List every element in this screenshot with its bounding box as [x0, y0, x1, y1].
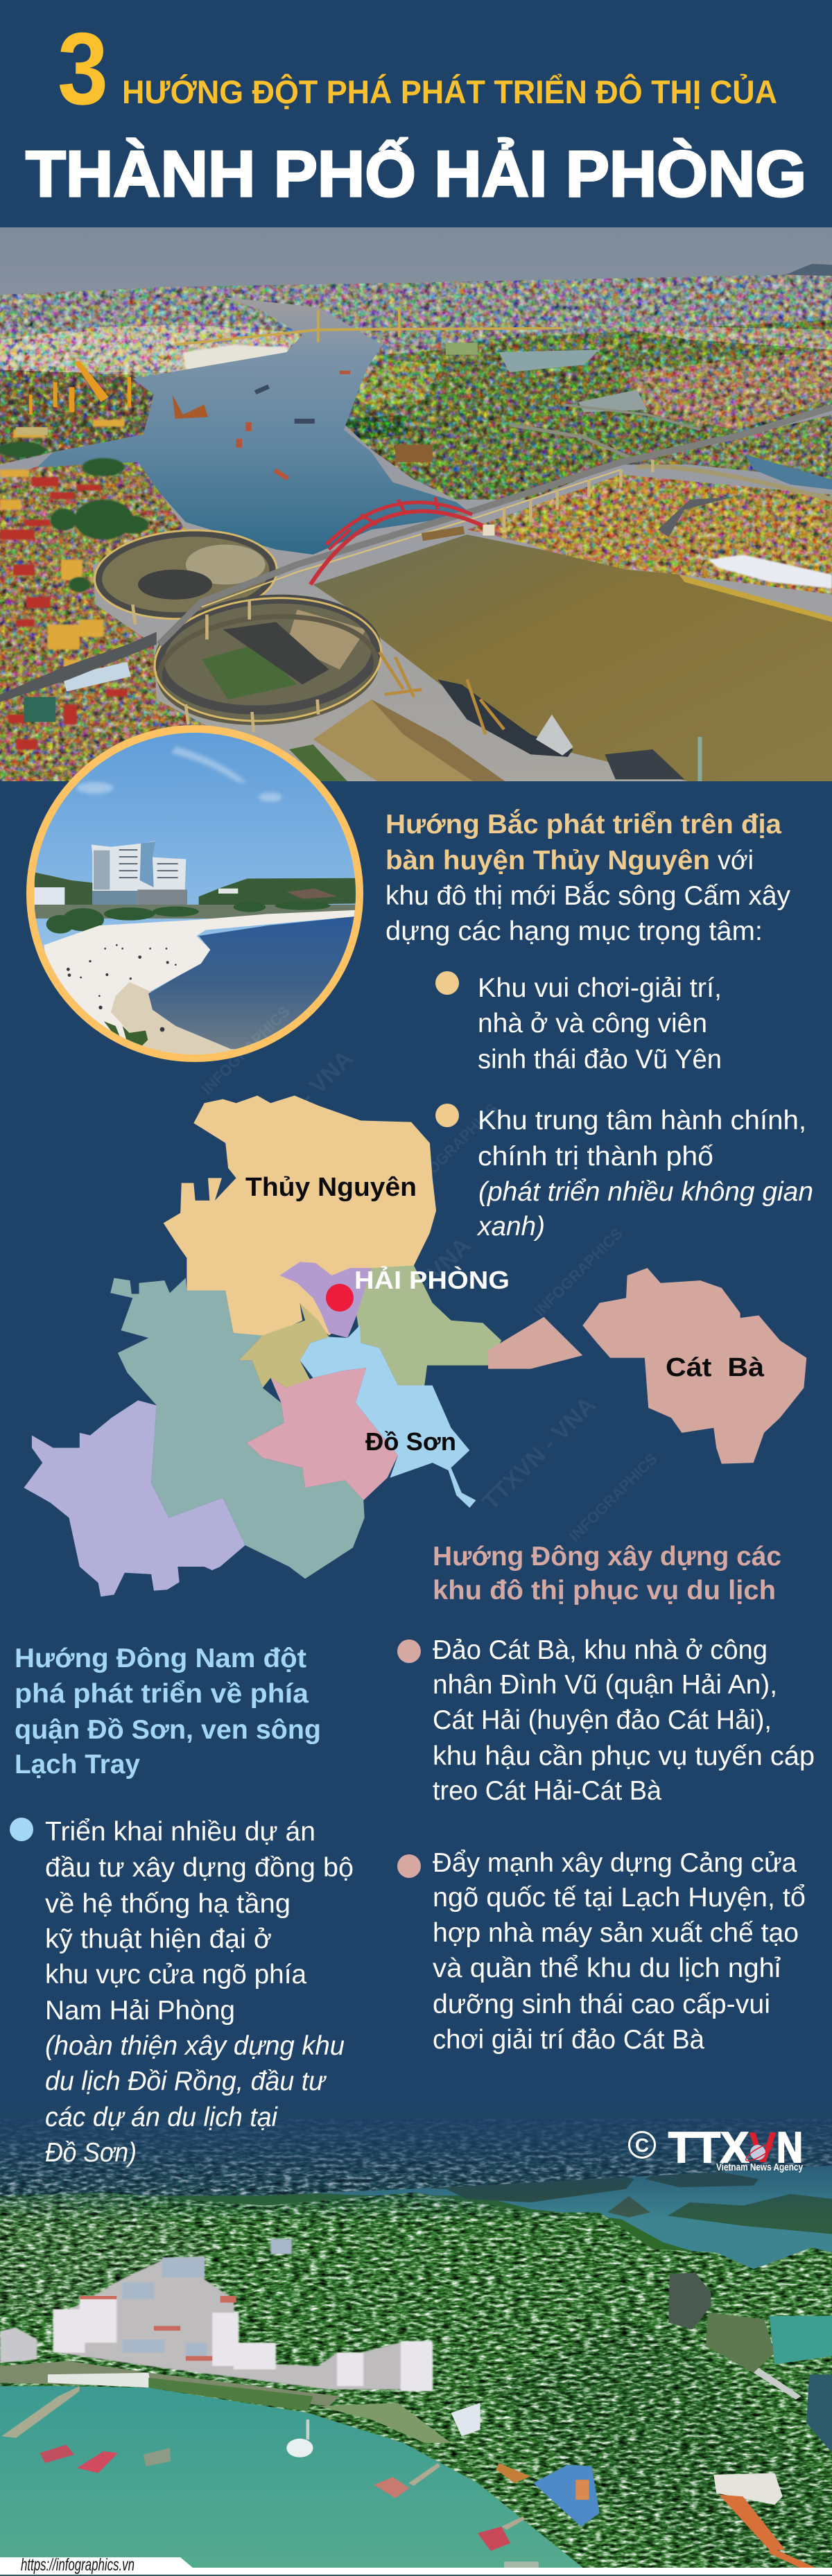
watermarks	[169, 1003, 661, 1545]
heading: east: khu đô thị phục vụ du lịch	[433, 1576, 776, 1605]
text: south-east	[45, 1817, 354, 2168]
text: south-east: các dự án du lịch tại	[45, 2103, 278, 2132]
text: east 1	[433, 1635, 815, 1806]
copyright mark	[630, 2132, 655, 2157]
map of Hai Phong	[24, 1095, 806, 1596]
watermarks: TTXVN - VNA	[169, 1416, 293, 1540]
text: east 2: và quần thể khu du lịch nghỉ	[433, 1953, 781, 1983]
map region: Do Son blue	[300, 1325, 476, 1508]
heading: north: Hướng Bắc phát triển trên địa	[385, 809, 781, 839]
wordmark: V	[749, 2124, 777, 2172]
label: Hai Phong: HẢI PHÒNG	[354, 1265, 510, 1294]
map region: green	[356, 1265, 501, 1385]
bullet: north 1	[435, 971, 459, 995]
text: north 1: nhà ở và công viên	[478, 1009, 707, 1038]
text: north 2: (phát triển nhiều không gian	[478, 1177, 813, 1207]
text: south-east: (hoàn thiện xây dựng khu	[45, 2031, 345, 2061]
text: south-east: về hệ thống hạ tầng	[45, 1889, 291, 1919]
heading: north: khu đô thị mới Bắc sông Cấm xây	[385, 881, 790, 911]
panel: east direction	[397, 1542, 815, 2055]
tagline: Vietnam News Agency	[716, 2161, 804, 2173]
map region: west purple	[24, 1400, 245, 1596]
text: north 2: chính trị thành phố	[478, 1142, 713, 1172]
heading: south-east: Lạch Tray	[15, 1750, 140, 1779]
map region: Cat Hai	[488, 1317, 582, 1369]
text: south-east: Nam Hải Phòng	[45, 1996, 235, 2026]
wordmark	[668, 2124, 803, 2172]
watermarks: INFOGRAPHICS	[531, 1225, 626, 1320]
url text: https://infographics.vn	[21, 2555, 135, 2575]
map region: pink	[247, 1368, 398, 1500]
marker: Hai Phong centre	[326, 1284, 354, 1312]
heading: east: Hướng Đông xây dựng các	[433, 1542, 781, 1572]
label: Cat Ba: Cát Bà	[666, 1353, 765, 1382]
text: east 1: khu hậu cần phục vụ tuyến cáp	[433, 1741, 815, 1771]
panel: south-east direction	[10, 1644, 354, 2168]
watermarks: TTXVN - VNA	[478, 1392, 601, 1515]
bullet: east 2	[397, 1854, 421, 1878]
text: east 2: hợp nhà máy sản xuất chế tạo	[433, 1918, 799, 1948]
text: south-east: Đồ Sơn)	[45, 2138, 137, 2168]
label: Do Son: Đồ Sơn	[365, 1427, 456, 1456]
map region: olive	[239, 1303, 329, 1388]
heading: south-east: phá phát triển về phía	[15, 1679, 309, 1709]
watermarks: INFOGRAPHICS	[198, 1003, 293, 1098]
text: north 1	[478, 973, 722, 1074]
title line one: HƯỚNG ĐỘT PHÁ PHÁT TRIỂN ĐÔ THỊ CỦA	[122, 73, 777, 110]
text: east 1: Cát Hải (huyện đảo Cát Hải),	[433, 1705, 772, 1735]
heading: east	[433, 1542, 781, 1605]
bullet: south-east	[10, 1818, 33, 1841]
heading: south-east: quận Đồ Sơn, ven sông	[15, 1715, 321, 1745]
map region: Thuy Nguyen	[164, 1095, 436, 1338]
text: east 2: Đẩy mạnh xây dựng Cảng cửa	[433, 1848, 797, 1878]
label: Thuy Nguyen: Thủy Nguyên	[245, 1173, 417, 1202]
title line two: THÀNH PHỐ HẢI PHÒNG	[26, 137, 806, 210]
text: north 2: Khu trung tâm hành chính,	[478, 1106, 806, 1135]
text: north 2: xanh)	[476, 1212, 545, 1242]
text: east 2: ngõ quốc tế tại Lạch Huyện, tổ	[433, 1883, 806, 1913]
logo: TTXVN	[630, 2124, 804, 2173]
map region: south-west teal	[110, 1278, 365, 1578]
text: north 1: sinh thái đảo Vũ Yên	[478, 1045, 722, 1074]
title number: 3	[58, 12, 108, 126]
text: north 2	[476, 1106, 813, 1242]
watermarks: TTXVN - VNA	[353, 1233, 476, 1356]
text: east 2: dưỡng sinh thái cao cấp-vui	[433, 1990, 770, 2019]
text: east 2: chơi giải trí đảo Cát Bà	[433, 2025, 704, 2055]
watermarks: TTXVN - VNA	[235, 1045, 358, 1169]
text: south-east: Triển khai nhiều dự án	[45, 1817, 315, 1847]
panel: north direction	[385, 809, 813, 1242]
text: east 1: nhân Đình Vũ (quận Hải An),	[433, 1670, 777, 1700]
text: south-east: đầu tư xây dựng đồng bộ	[45, 1853, 354, 1883]
footer url tab	[0, 2555, 832, 2576]
text: east 1: treo Cát Hải-Cát Bà	[433, 1776, 661, 1806]
bullet: east 1	[397, 1639, 421, 1663]
text: north 1: Khu vui chơi-giải trí,	[478, 973, 722, 1003]
heading: south-east	[15, 1644, 321, 1779]
heading: north: bàn huyện Thủy Nguyên	[385, 846, 710, 876]
header banner	[0, 0, 832, 227]
bullet: north 2	[435, 1104, 459, 1127]
heading: north	[385, 809, 790, 946]
text: south-east: kỹ thuật hiện đại ở	[45, 1924, 272, 1954]
map region: Cat Ba	[582, 1268, 806, 1464]
circle photo: Vu Yen beach	[23, 725, 367, 1065]
map region: central purple	[279, 1262, 372, 1338]
text: east 2	[433, 1848, 806, 2055]
fade into background	[0, 2100, 832, 2222]
text: south-east: khu vực cửa ngõ phía	[45, 1960, 306, 1990]
heading: north: dựng các hạng mục trọng tâm:	[385, 916, 763, 946]
photo: Cat Ba island	[0, 2100, 832, 2576]
watermarks: INFOGRAPHICS	[566, 1450, 661, 1545]
wordmark: N	[777, 2124, 803, 2172]
text: east 1: Đảo Cát Bà, khu nhà ở công	[433, 1635, 768, 1665]
wordmark: TTX	[668, 2124, 749, 2172]
heading: north: với	[718, 846, 754, 876]
photo: Hai Phong river and bridge	[0, 227, 832, 784]
watermarks: INFOGRAPHICS	[406, 1100, 501, 1195]
copyright mark: C	[635, 2134, 649, 2156]
heading: south-east: Hướng Đông Nam đột	[15, 1644, 306, 1673]
text: south-east: du lịch Đồi Rồng, đầu tư	[45, 2066, 327, 2096]
